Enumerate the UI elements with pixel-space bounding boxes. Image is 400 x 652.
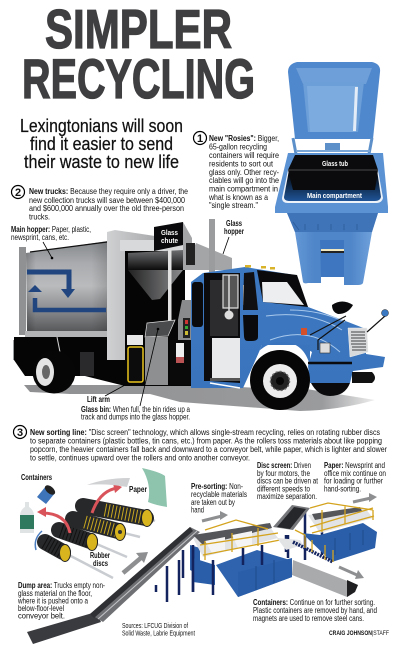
text: paper: Paper: Newsprint and [324, 461, 385, 470]
right side pillar [178, 300, 192, 385]
callout 1: new rosies: glass only. Other recy- [209, 168, 279, 177]
label: lift arm: Lift arm [87, 395, 110, 404]
gray direction arrow [123, 557, 142, 573]
main compartment label: Main compartment [307, 193, 363, 200]
callout 1: new rosies: "single stream." [209, 201, 258, 210]
rear wheel [32, 350, 76, 394]
text: pre-sorting: hand [191, 506, 204, 514]
hopper arrow [27, 272, 106, 310]
text: pre-sorting: recyclable materials [191, 490, 247, 499]
truck labels [11, 219, 244, 422]
text: dump area: conveyor belt. [18, 612, 65, 620]
left platform [193, 520, 280, 560]
text: disc screen: maximize separation. [257, 492, 317, 501]
label: main hopper: Main hopper: Paper, plastic, [11, 225, 91, 234]
roller 3 [73, 519, 140, 540]
roller 1 [45, 542, 113, 578]
label: rubber discs [90, 551, 110, 568]
glass bin [127, 320, 175, 385]
amber lights [245, 265, 275, 270]
blue bin behind conveyor [190, 545, 200, 575]
headlight [320, 343, 330, 353]
text: pre-sorting: Pre-sorting: Non- [191, 482, 243, 491]
rear panel [19, 247, 26, 335]
text: sources: Solid Waste, Labrie Equipment [122, 630, 195, 638]
container conveyor [292, 560, 358, 597]
grab handle [224, 310, 234, 320]
callout 2: new trucks: New trucks: Because they require only a driver, the [29, 187, 188, 196]
label: main hopper [11, 225, 91, 259]
subtitle: find it easier to send [30, 134, 173, 154]
text: paper [324, 461, 386, 494]
illustration: recycling bin [275, 62, 388, 285]
number 3 [14, 426, 26, 439]
illustration: conveyor [27, 527, 200, 644]
number 1: 1 [197, 133, 203, 145]
text: dump area: Dump area: Trucks empty non- [18, 581, 105, 590]
text: paper: hand-sorting. [324, 484, 361, 494]
gray arrows [202, 516, 222, 521]
marker light [301, 328, 307, 335]
text: sources: Sources: LFCUG Division of [122, 623, 188, 630]
grille [348, 328, 368, 357]
left blue bins [193, 558, 215, 585]
glass tub [288, 155, 378, 190]
text: disc screen [257, 461, 319, 501]
label: glass bin: track and dumps into the glass hopper. [81, 412, 190, 422]
label: containers: Containers [21, 473, 52, 482]
callout 1: new rosies: containers will require [209, 151, 279, 160]
label: rubber discs: Rubber [90, 551, 110, 560]
text: dump area [17, 581, 105, 620]
right platform [308, 503, 374, 533]
right blue bins [302, 523, 377, 562]
text: paper: office mix continue on [324, 469, 386, 478]
chassis [14, 337, 196, 386]
text: pre-sorting [191, 482, 247, 514]
label: glass bin [81, 328, 190, 422]
subtitle: their waste to new life [24, 152, 179, 172]
icon: bottle [20, 502, 34, 533]
text: sources [122, 623, 195, 638]
hinges [293, 138, 372, 154]
glass chute sign: Glass [161, 230, 178, 237]
credit: CRAIG JOHNSON|STAFF [329, 630, 389, 637]
label: lift arm [87, 385, 125, 404]
callout 1: new rosies: clables will go into the [209, 176, 279, 185]
number 2: 2 [15, 187, 21, 199]
title: RECYCLING [22, 47, 255, 110]
bin rim and interior [275, 153, 388, 213]
door opening [204, 273, 240, 383]
tail light panel [176, 318, 190, 363]
ramp: disc screen conveyor [273, 505, 310, 530]
door windows [192, 282, 203, 327]
callout 1: new rosies: what is known as a [208, 193, 268, 202]
text: containers: magnets are used to remove steel cans. [253, 614, 364, 623]
black midsection [125, 251, 185, 376]
bumper line [308, 362, 352, 364]
windshield [257, 270, 308, 307]
side frame [107, 230, 193, 360]
icon: paper [87, 468, 167, 507]
label: rubber discs: discs [93, 559, 108, 568]
hood highlights [266, 310, 345, 352]
callout 1: new rosies: New "Rosies": Bigger, [209, 134, 279, 143]
callout 2: new trucks: trucks. [29, 212, 50, 222]
callout 2: new trucks: new collection trucks will save between $400,000 [29, 196, 185, 205]
cab [191, 265, 388, 388]
stairs [293, 542, 333, 562]
label: paper: Paper [129, 485, 147, 494]
label: main hopper: newsprint, cans, etc. [11, 233, 69, 242]
exhaust stack [209, 219, 215, 274]
callout 3: new sorting line: to settle, continues upward over the rollers and onto another conveyor. [30, 454, 250, 462]
text: pre-sorting: are taken out by [191, 498, 235, 507]
number 3: 3 [17, 427, 23, 439]
mirror [332, 302, 353, 314]
subtitle [20, 116, 183, 172]
icon: can [37, 483, 57, 504]
label: glass bin: Glass bin: When full, the bin rides up a [81, 405, 190, 414]
callout 1: new rosies: residents to sort out [209, 160, 274, 168]
text: paper: for loading or further [324, 476, 383, 486]
rotation arrow [35, 531, 42, 550]
text: disc screen: discs can be driven at [257, 476, 319, 486]
callout 2: new trucks [12, 186, 188, 222]
legs [193, 510, 322, 595]
subtitle: Lexingtonians will soon [20, 116, 183, 136]
cab shell [191, 267, 385, 388]
text: dump area: where it is pushed onto a [17, 596, 88, 606]
illustration: truck [13, 219, 388, 411]
text: dump area: below-floor-level [18, 604, 64, 613]
inclined belt [90, 527, 200, 622]
text: disc screen: by four motors, the [257, 469, 310, 478]
ground shadow [24, 385, 375, 411]
title [22, 0, 255, 110]
chute funnel [128, 250, 183, 300]
label: glass hopper [223, 219, 244, 254]
callout 1: new rosies [194, 132, 279, 210]
roller 2 [59, 530, 127, 557]
text: disc screen: different speeds to [257, 484, 310, 494]
bin body [287, 213, 378, 285]
label: glass hopper: Glass [226, 219, 242, 228]
callout 2: new trucks: and $600,000 annually over the old three-person [29, 204, 184, 213]
text: dump area: glass material on the floor, [18, 589, 92, 598]
text: containers: Containers: Continue on for further sorting. [253, 598, 375, 607]
illustration: disc rollers [20, 468, 167, 578]
glass hopper [183, 222, 232, 270]
chute post [168, 250, 172, 322]
glass chute sign [154, 222, 183, 251]
red arrows [42, 513, 70, 533]
middle platform [277, 538, 303, 550]
roller 4 [83, 506, 155, 526]
support legs [156, 548, 193, 602]
callout 3: new sorting line [14, 426, 387, 462]
text: disc screen: Disc screen: Driven [257, 461, 311, 470]
front wheel [250, 350, 375, 410]
illustration: sorting platforms [193, 493, 377, 597]
glass tub: Glass tub [322, 161, 348, 168]
callout 1: new rosies: 65-gallon recycling [209, 142, 267, 152]
bin lid [288, 62, 380, 139]
label: glass hopper: hopper [224, 227, 244, 236]
number 2 [12, 186, 24, 199]
main hopper body [26, 241, 108, 331]
callout 1: new rosies: main compartment in [209, 184, 278, 194]
text: containers [253, 598, 377, 623]
horizontal belt [27, 612, 101, 644]
glass chute sign: chute [161, 238, 178, 245]
